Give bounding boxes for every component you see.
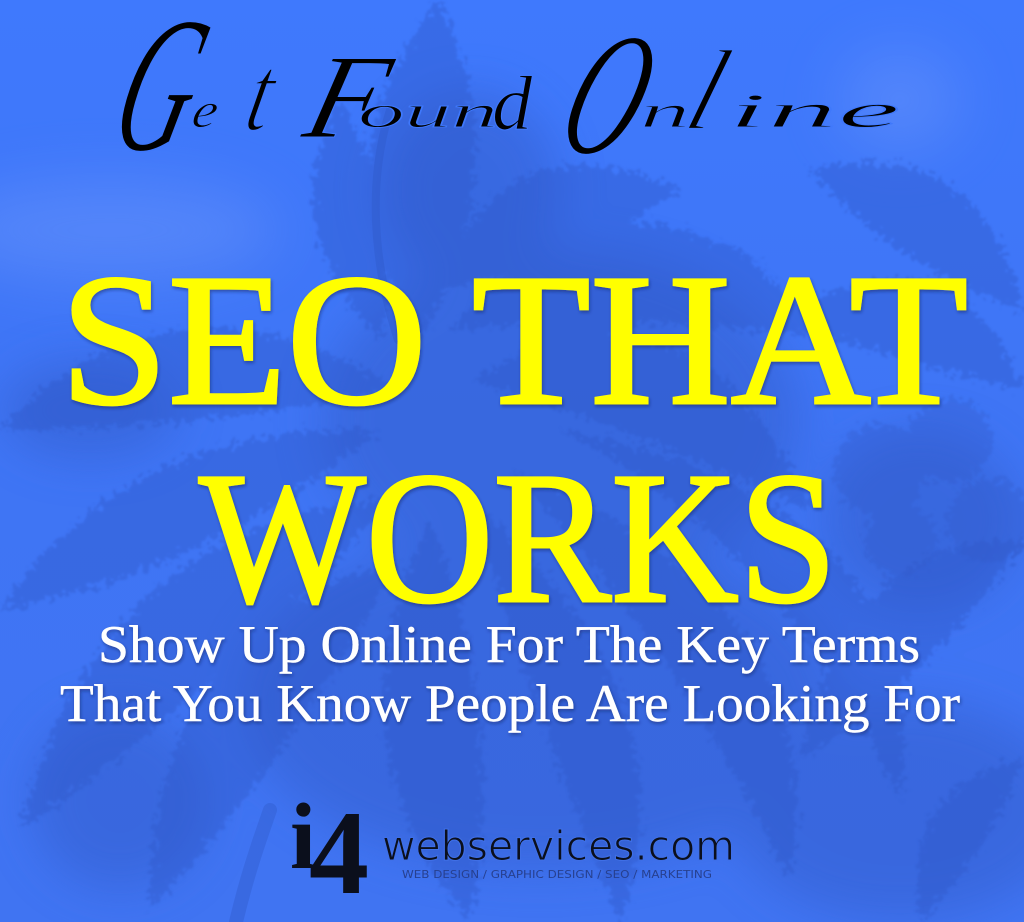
script heading: Get Found Online: F (292, 30, 404, 163)
subtitle (60, 616, 960, 733)
script heading: Get Found Online: l (674, 28, 743, 155)
logo mark i4: i (290, 785, 316, 889)
logo: i4 webservices.com (290, 785, 735, 919)
script heading: Get Found Online: oun (358, 86, 498, 137)
script heading: Get Found Online: O (540, 0, 679, 191)
logo mark i4: 4 (309, 786, 369, 919)
tree foliage at right (834, 398, 1024, 576)
clouds (0, 50, 960, 280)
script heading: Get Found Online: e (188, 84, 224, 138)
script heading: Get Found Online: d (492, 61, 533, 147)
main title: SEO THAT WORKS: SEO THAT (60, 235, 968, 444)
script heading: Get Found Online: ine (728, 85, 900, 138)
palm trunks (236, 110, 398, 922)
subtitle: Show Up Online For The Key Terms (98, 616, 920, 674)
logo tagline: WEB DESIGN / GRAPHIC DESIGN / SEO / MARKETING (402, 868, 712, 881)
script heading: Get Found Online: t (237, 34, 288, 154)
main title: SEO THAT WORKS: WORKS (199, 433, 837, 642)
script heading: Get Found Online: n (640, 86, 690, 137)
main title: SEO THAT WORKS (60, 235, 968, 642)
subtitle: That You Know People Are Looking For (60, 675, 960, 733)
logo wordmark: webservices.com (382, 822, 735, 870)
script heading: Get Found Online (94, 0, 900, 192)
